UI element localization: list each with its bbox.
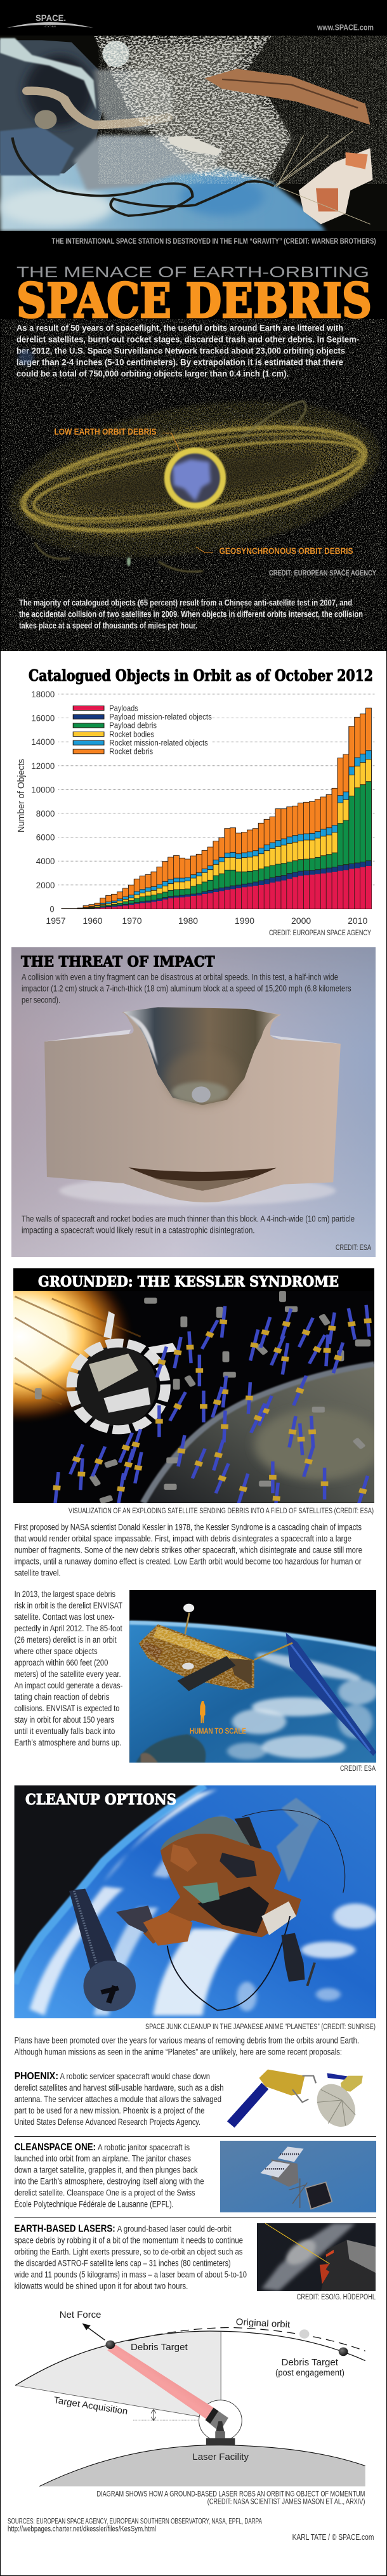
phoenix text: derelict satellites and harvest still-usable hardware, such as a dish [15,2083,223,2093]
envisat text: satellite. Contact was lost unex- [15,1612,115,1622]
laser telescope photo [257,2223,376,2291]
human to scale marker: HUMAN TO SCALE [190,1727,246,1736]
y axis labels: 8000 [36,808,55,818]
diagram: ground-based laser: (post engagement) [275,2368,344,2377]
x axis labels: 1990 [235,916,254,926]
intro text: As a result of 50 years of spaceflight, the useful orbits around Earth are littered with [16,324,343,332]
earth-based lasers text: orbiting the Earth. Light exerts pressure, so to de-orbit an object such as [15,2247,243,2256]
cleanspace text: CLEANSPACE ONE: [15,2142,96,2153]
explosion fire [13,1291,130,1421]
cleanspace text: launched into orbit from an airplane. The janitor chases [15,2153,191,2164]
diagram: ground-based laser: Debris Target [282,2358,338,2368]
cleanspace text [15,2142,204,2209]
website url: www.SPACE.com [317,23,374,32]
legend: Payloads [109,704,138,713]
wires [274,131,371,224]
earth-based lasers text: A ground-based laser could de-orbit [117,2224,232,2233]
diagram caption [96,2491,365,2506]
diagram: ground-based laser: Original orbit [235,2317,291,2330]
cleanspace text: derelict satellite. Cleanspace One is a project of the Swiss [15,2188,195,2198]
phoenix text: A robotic servicer spacecraft would chase down [60,2072,210,2081]
debris balls [106,2341,115,2349]
ground [39,2445,365,2487]
earth [15,1785,376,2018]
earth with low orbit ring [167,450,223,506]
stacked bars [61,708,371,909]
envisat photo [129,1590,377,1763]
human to scale marker [190,1701,246,1736]
phoenix text: United States Defense Advanced Research Projects Agency. [15,2117,200,2127]
space.com logo [7,13,93,28]
x axis labels: 1960 [82,916,103,926]
satellite body [139,1624,254,1690]
white content sheet [1,651,386,2575]
divider rule [15,2136,376,2137]
kessler text [15,1523,362,1577]
thin tether [242,1810,345,1893]
middle station wreck [74,135,222,190]
x axis labels [46,916,367,926]
envisat text: In 2013, the largest space debris [15,1589,115,1599]
y axis labels: 12000 [31,761,55,771]
acquisition area [15,2331,221,2417]
envisat credit: CREDIT: ESA [340,1765,376,1773]
credit: ESA: CREDIT: ESA [336,1244,371,1252]
envisat text: Earth’s atmosphere and burns up. [15,1738,121,1747]
orange-brown panel [205,69,371,125]
y axis labels: 6000 [36,832,55,843]
cloud bands [30,1789,377,2016]
orbital debris visualization [0,350,387,581]
envisat text: (26 meters) derelict is in an orbit [15,1635,117,1645]
earth-based lasers text [14,2223,247,2290]
envisat text: risk in orbit is the derelict ENVISAT [15,1601,122,1610]
panel: the threat of impact [11,947,376,1257]
earth limb and ocean [129,1621,376,1763]
envisat text [14,1589,122,1747]
station upper left [0,40,103,173]
x axis labels: 1970 [122,916,142,926]
envisat text: until it eventually falls back into [15,1726,115,1736]
diagram: ground-based laser: Laser Facility [192,2452,249,2462]
earth-based lasers text: space debris by robbing it of a bit of the momentum it needs to continue [15,2236,243,2245]
space.com logo: SPACE. [36,13,66,23]
x axis labels: 1957 [46,916,66,926]
dome [199,2400,242,2441]
intro text: larger than 2-4 inches (5-10 centimeters). By extrapolation it is estimated that there [16,358,343,367]
envisat text: tating chain reaction of debris [15,1692,110,1702]
diagram: ground-based laser: Debris Target [131,2343,188,2353]
phoenix text [15,2071,223,2127]
second paragraph: takes place at a speed of thousands of miles per hour. [19,621,197,631]
land [136,1734,206,1763]
y axis title: Number of Objects [16,759,27,832]
flying debris haze [128,43,291,176]
antenna dish [183,1604,194,1634]
envisat text: stay in orbit for about 150 years [15,1715,114,1725]
y axis labels: 14000 [31,737,55,747]
bolt [69,1889,136,2011]
earth below [0,161,327,231]
legend: Rocket mission-related objects [109,739,208,747]
legend: Payload mission-related objects [109,713,212,721]
phoenix text: part to be used for a new mission. Phoenix is a project of the [15,2106,204,2115]
field of satellites [51,1304,373,1515]
cleanup intro [15,2035,359,2057]
debris cylinders [35,1291,371,1504]
text above block: per second). [22,995,60,1005]
tether [12,138,274,216]
star field [1,319,386,651]
legend [70,702,212,756]
diagram labels: Net Force [60,2310,102,2320]
land mass [277,1797,321,1883]
phoenix text: antenna. The servicer attaches a module that allows the salvaged [15,2094,221,2104]
hero photo: space station destroyed in Gravity [0,36,387,231]
long tether and jetpack [167,1916,290,2010]
text above block [22,972,351,1005]
y axis labels: 0 [49,904,55,914]
text below block [22,1214,355,1235]
sources [8,2518,262,2533]
telescope [206,2408,228,2432]
earth-based lasers text: wide and 11 pounds (5 kilograms) in mass – a laser beam of about 5-to-10 [14,2270,247,2279]
intro text: ber 2012, the U.S. Space Surveillance Network tracked about 23,000 orbiting objects [16,346,345,355]
label: low earth orbit debris: LOW EARTH ORBIT DEBRIS [55,426,156,437]
shattered satellite [75,1346,157,1426]
debris orbit [15,2331,365,2386]
y axis labels: 4000 [36,856,55,866]
envisat text: meters) of the satellite every year. [15,1669,121,1679]
envisat text: An impact could generate a devas- [15,1681,122,1690]
cleanspace one image [220,2141,376,2212]
second paragraph [19,598,363,631]
text below block: impacting a spacecraft would likely result in a catastrophic disintegration. [22,1226,255,1235]
astronaut [116,1817,301,1946]
panel: kessler syndrome heading bar: GROUNDED: THE KESSLER SYNDROME [38,1274,339,1291]
atmosphere edge [15,1785,205,1984]
cleanspace text: into the Earth’s atmosphere, destroying itself along with the [15,2176,204,2186]
aluminum block photo [44,1007,341,1206]
bar chart: catalogued objects [16,689,375,926]
solar array [285,1633,376,1756]
y axis labels: 2000 [36,880,55,890]
x axis labels: 1980 [178,916,198,926]
x axis labels: 2000 [291,916,311,926]
foil sheet [299,148,372,224]
earth-based lasers text: the discarded ASTRO-F satellite lens cap – 31 inches (80 centimeters) [15,2259,231,2268]
laser beam [107,2344,214,2419]
legend: Rocket debris [109,747,153,756]
intro text: could be a total of 750,000 orbiting objects larger than 0.4 inch (1 cm). [16,369,289,378]
diagram: ground-based laser: Target Acquisition [53,2395,128,2417]
acquisition lines [15,2331,221,2417]
earth-based lasers text: EARTH-BASED LASERS: [15,2223,115,2235]
y axis labels [31,689,55,914]
title: THE MENACE OF EARTH-ORBITING [16,264,369,281]
cleanup options heading: CLEANUP OPTIONS [25,1791,176,1808]
cleanspace text: A robotic janitor spacecraft is [98,2143,190,2152]
intro text: derelict satellites, burnt-out rocket stages, discarded trash and other debris. In Septem- [16,335,359,344]
intro text [16,324,359,378]
legend: Rocket bodies [109,730,154,739]
heading: THE THREAT OF IMPACT [21,953,214,971]
diagram: ground-based laser [15,2310,365,2487]
flying debris cloud [94,36,291,180]
clouds [227,1648,377,1759]
kessler text: satellite travel. [15,1568,61,1577]
cleanspace text: École Polytechnique Fédérale de Lausanne (EPFL). [15,2199,174,2209]
net force arrow [86,2327,105,2340]
grid lines [58,694,375,885]
envisat text: collisions. ENVISAT is expected to [15,1704,119,1713]
phoenix text: PHOENIX: [15,2071,58,2082]
envisat text: approach within 660 feet (200 [15,1658,108,1667]
exploding satellite visualization [13,1291,374,1503]
label: low earth orbit debris [55,426,180,450]
y axis labels: 16000 [31,713,55,723]
x axis labels: 2010 [348,916,367,926]
earth-based lasers text: kilowatts would be shined upon it for about two hours. [15,2282,188,2290]
label: geosynchronous orbit debris: GEOSYNCHRONOUS ORBIT DEBRIS [220,546,353,556]
panel: kessler syndrome heading bar [13,1268,374,1291]
earth [143,1364,374,1503]
divider rule [15,2217,376,2218]
cleanspace text: down a target satellite, grapples it, and then plunges back [15,2165,198,2175]
space.com logo: .COM [43,25,56,28]
envisat text: pectedly in April 2012. The 85-foot [15,1624,122,1633]
cleanup illustration: planetes anime [14,1785,377,2018]
astronaut arm [27,91,168,125]
sources: http://webpages.charter.net/dkessler/files/KesSym.html [8,2525,156,2533]
envisat text: where other space objects [14,1646,98,1656]
boom [254,1643,292,1660]
icon: phoenix spacecraft and salvaged dish [227,2070,363,2132]
y axis labels: 18000 [31,689,55,699]
legend: Payload debris [109,721,157,730]
original orbit dashed [128,2328,365,2351]
sources: SOURCES: EUROPEAN SPACE AGENCY, EUROPEAN SOUTHERN OBSERVATORY, NASA, EPFL, DARPA [8,2518,262,2525]
y axis labels: 10000 [31,784,55,794]
